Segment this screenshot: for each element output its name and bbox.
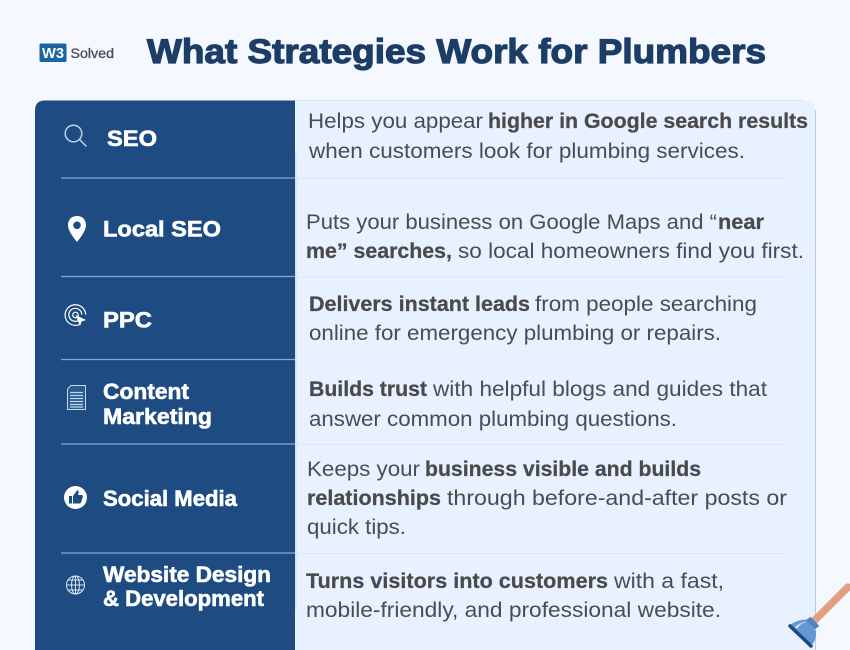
description: SEO: Helps you appear (308, 110, 483, 133)
description: Website Design (306, 570, 724, 622)
icon: plunger (790, 587, 848, 646)
description: PPC (309, 293, 757, 345)
description: Content Marketing: with helpful blogs and guides that (432, 378, 767, 401)
panel: descriptions (295, 100, 816, 650)
label: SEO: SEO (107, 126, 157, 151)
panel: strategies (35, 100, 295, 650)
logo: W3 Solved (40, 44, 114, 62)
label: Content Marketing (103, 379, 212, 429)
icon: globe (66, 576, 84, 594)
description: Social Media: relationships (307, 487, 441, 510)
description: Website Design: Turns visitors into customers (306, 570, 608, 593)
description: Local SEO: me” searches, (306, 240, 452, 263)
icon: magnifier (65, 125, 86, 146)
description: Website Design: with a fast, (613, 570, 724, 593)
label: Content Marketing: Marketing (103, 404, 212, 429)
description: Website Design: mobile-friendly, and professional website. (306, 599, 721, 622)
description: SEO: when customers look for plumbing services. (308, 140, 745, 163)
label: Website Design & Development: & Development (103, 586, 265, 611)
description: SEO: higher in Google search results (488, 110, 808, 133)
description: PPC: from people searching (535, 293, 757, 316)
description: Social Media: through before-and-after posts or (447, 487, 787, 510)
title: What Strategies Work for Plumbers (147, 33, 766, 71)
icon: document (68, 386, 86, 410)
description: Local SEO: near (718, 211, 764, 234)
logo: W3 Solved: W3 (42, 45, 64, 62)
label: Website Design & Development: Website Design (103, 562, 271, 587)
description: Content Marketing: answer common plumbing questions. (309, 408, 677, 431)
description: Social Media (307, 458, 787, 539)
description: Social Media: quick tips. (307, 516, 406, 539)
logo: W3 Solved: Solved (70, 45, 114, 61)
description: Local SEO: Puts your business on Google Maps and “ (306, 211, 717, 234)
description: SEO (308, 110, 808, 163)
description: Social Media: business visible and builds (425, 458, 701, 481)
description: Local SEO: so local homeowners find you first. (458, 240, 804, 263)
icon: target with cursor (65, 305, 86, 326)
icon: map pin (68, 216, 86, 242)
description: Local SEO (306, 211, 804, 263)
label: PPC: PPC (103, 308, 152, 332)
label: Content Marketing: Content (103, 379, 190, 404)
icon: thumbs up (64, 486, 87, 509)
description: Social Media: Keeps your (307, 458, 420, 481)
label: Social Media: Social Media (103, 486, 238, 511)
label: Website Design & Development (103, 562, 271, 611)
description: PPC: Delivers instant leads (309, 293, 530, 316)
description: PPC: online for emergency plumbing or repairs. (309, 322, 721, 345)
label: Local SEO: Local SEO (103, 216, 221, 242)
description: Content Marketing: Builds trust (309, 378, 427, 401)
description: Content Marketing (309, 378, 767, 431)
